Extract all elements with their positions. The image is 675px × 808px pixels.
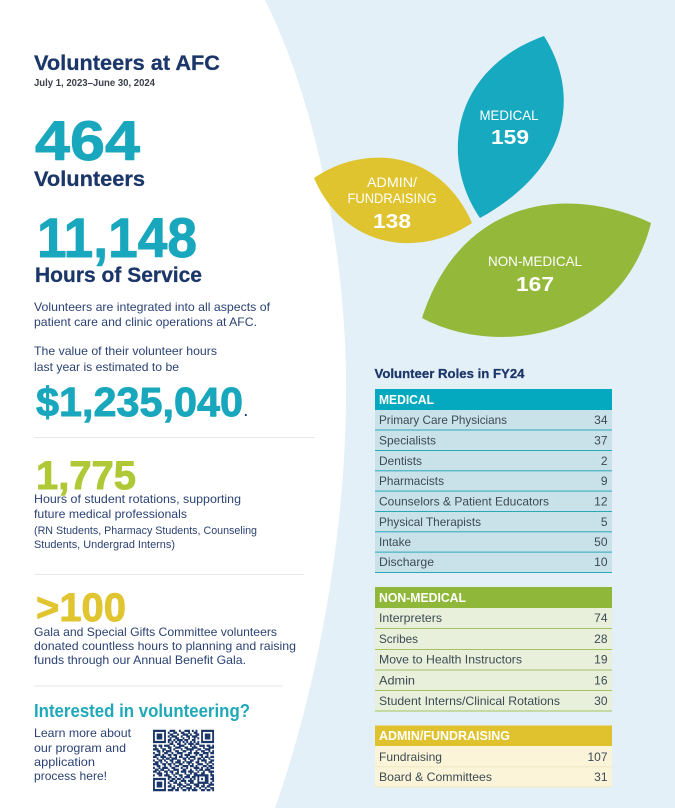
stat: 464 volunteers: [34, 109, 145, 191]
text block: learn more: our program and: [34, 741, 126, 755]
icon: QR code: [153, 731, 214, 790]
table: medical roles: Intake: [379, 535, 411, 549]
stat: dollar value: .: [244, 404, 248, 419]
stat: 11,148 hours of service: 11,148: [37, 206, 197, 269]
table: admin/fundraising roles: ADMIN/FUNDRAISING: [379, 729, 510, 743]
text block: learn more: application: [34, 755, 95, 769]
table: non-medical roles: Move to Health Instructors: [379, 652, 522, 666]
table: medical roles: Primary Care Physicians: [379, 413, 507, 427]
chart: leaf breakdown of volunteers: [314, 36, 651, 337]
table: medical roles: Physical Therapists: [379, 515, 481, 529]
text block: integration of volunteers: [34, 300, 271, 374]
leaf: non-medical: 167: [516, 274, 554, 296]
call to action: [34, 701, 250, 790]
table: non-medical roles: Interpreters: [379, 611, 442, 625]
table: medical roles: 12: [594, 494, 608, 508]
table: medical roles: Counselors & Patient Educators: [379, 494, 549, 508]
table: non-medical roles: 19: [594, 652, 608, 666]
leaf: medical: MEDICAL: [480, 107, 539, 123]
table: non-medical roles: 28: [594, 632, 608, 646]
table: non-medical roles: Admin: [379, 674, 415, 688]
table: medical roles: 10: [594, 555, 608, 569]
table: medical roles: 2: [601, 454, 608, 468]
heading: interested in volunteering: Interested in volunteering?: [34, 701, 250, 721]
leaf: admin/fundraising: ADMIN/: [367, 174, 417, 190]
leaf: non-medical: [422, 204, 651, 337]
text block: integration of volunteers: last year is estimated to be: [34, 360, 179, 374]
table: non-medical roles: [375, 587, 612, 712]
leaf: admin/fundraising: 138: [373, 211, 411, 233]
table: medical roles: Dentists: [379, 454, 422, 468]
table: non-medical roles: 74: [594, 611, 608, 625]
stat: 464 volunteers: 464: [35, 109, 140, 172]
table: admin/fundraising roles: 107: [587, 750, 608, 764]
table: medical roles: MEDICAL: [379, 393, 434, 407]
stat: 1,775 student rotation hours: (RN Students, Pharmacy Students, Counseling: [34, 525, 257, 537]
text block: learn more: Learn more about: [34, 726, 132, 740]
stat: dollar value: $1,235,040: [36, 379, 243, 425]
text block: integration of volunteers: Volunteers are integrated into all aspects of: [34, 300, 271, 314]
stat: >100 gala volunteers: donated countless hours to planning and raising: [34, 639, 296, 653]
table: non-medical roles: 16: [594, 674, 608, 688]
table: admin/fundraising roles: [375, 726, 612, 787]
stat: 11,148 hours of service: Hours of Service: [35, 264, 202, 287]
table: medical roles: 34: [594, 413, 608, 427]
stat: 1,775 student rotation hours: 1,775: [36, 454, 136, 498]
table: admin/fundraising roles: Board & Committees: [379, 770, 492, 784]
stat: 1,775 student rotation hours: future medical professionals: [34, 507, 187, 521]
leaf: admin/fundraising: FUNDRAISING: [348, 190, 436, 206]
title block: [34, 52, 220, 89]
table: medical roles: 37: [594, 434, 608, 448]
table: medical roles: Specialists: [379, 434, 436, 448]
stat: 1,775 student rotation hours: Hours of student rotations, supporting: [34, 492, 241, 506]
text block: integration of volunteers: The value of their volunteer hours: [34, 344, 217, 358]
table: non-medical roles: NON-MEDICAL: [379, 591, 466, 605]
table: medical roles: Discharge: [379, 555, 434, 569]
title block: Volunteers at AFC: [34, 52, 220, 75]
table: medical roles: 9: [601, 474, 608, 488]
leaf: non-medical: NON-MEDICAL: [488, 253, 582, 269]
title block: July 1, 2023–June 30, 2024: [34, 78, 155, 89]
stat: 1,775 student rotation hours: [34, 454, 257, 551]
leaf: admin/fundraising: [314, 158, 472, 243]
table: non-medical roles: Student Interns/Clinical Rotations: [379, 694, 560, 708]
heading: volunteer roles: Volunteer Roles in FY24: [374, 366, 525, 381]
text block: learn more: [34, 726, 132, 783]
leaf: medical: 159: [491, 127, 529, 149]
stat: >100 gala volunteers: [34, 586, 296, 667]
table: non-medical roles: 30: [594, 694, 608, 708]
leaf: medical: [458, 36, 564, 218]
stat: 1,775 student rotation hours: Students, Undergrad Interns): [34, 539, 175, 551]
text block: integration of volunteers: patient care and clinic operations at AFC.: [34, 315, 257, 329]
table: admin/fundraising roles: 31: [594, 770, 608, 784]
table: admin/fundraising roles: Fundraising: [379, 750, 442, 764]
stat: >100 gala volunteers: >100: [36, 586, 126, 630]
table: non-medical roles: Scribes: [379, 632, 418, 646]
stat: >100 gala volunteers: funds through our Annual Benefit Gala.: [34, 653, 246, 667]
table: medical roles: [375, 389, 612, 573]
stat: 464 volunteers: Volunteers: [34, 168, 145, 191]
table: medical roles: 50: [594, 535, 608, 549]
table: medical roles: Pharmacists: [379, 474, 444, 488]
table: medical roles: 5: [601, 515, 608, 529]
stat: >100 gala volunteers: Gala and Special Gifts Committee volunteers: [34, 625, 277, 639]
text block: learn more: process here!: [34, 769, 107, 783]
